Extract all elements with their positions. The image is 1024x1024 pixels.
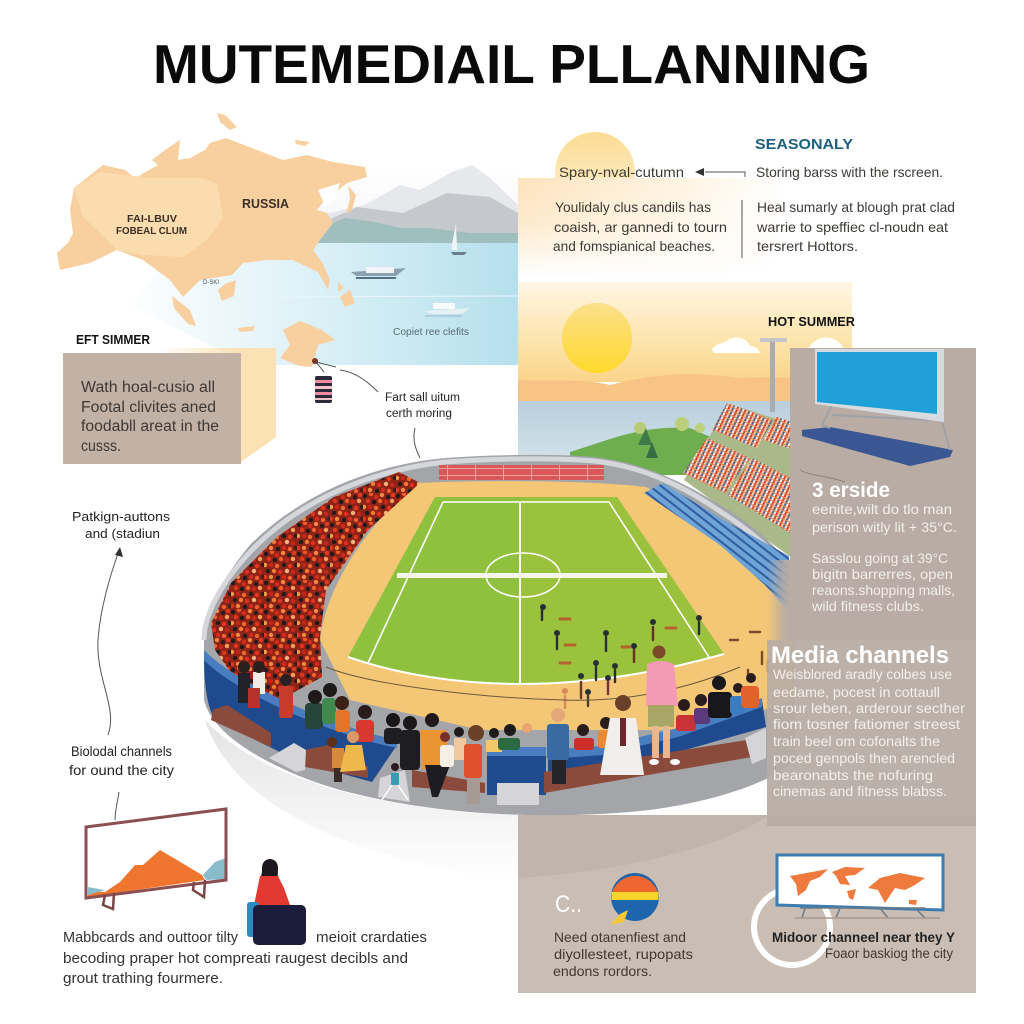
stadium outer rim xyxy=(204,455,795,815)
text block: beige box: Wath hoal-cusio all xyxy=(81,379,215,396)
text block: midoor channel: Midoor channeel near they Y xyxy=(772,930,955,945)
panel: left beige text box with peach backing xyxy=(63,348,276,464)
map labels: FAI-LBUV xyxy=(127,214,177,225)
callout: patkign-auttons xyxy=(72,509,171,541)
arrowheads xyxy=(115,168,704,557)
text block: 3 erside: reaons.shopping malls, xyxy=(812,582,955,598)
map labels: FOBEAL CLUM xyxy=(116,226,187,237)
text block: 3 erside: perison witly lit + 35°C. xyxy=(812,519,957,535)
text block: 3 erside xyxy=(811,479,957,614)
text block: seasonal right: tersrert Hottors. xyxy=(757,238,858,254)
text block: 3 erside: wild fitness clubs. xyxy=(811,598,924,614)
infographic stands behind stadium xyxy=(683,403,795,560)
text block: seasonal left: Youlidaly clus candils has xyxy=(555,199,711,215)
text block: seasonal right: Heal sumarly at blough prat clad xyxy=(757,199,955,215)
callout: biolodal channels: for ound the city xyxy=(69,763,174,778)
icon: orange flag circle xyxy=(610,873,659,925)
panel: media channels grey panel xyxy=(767,560,976,826)
text block: bottom left: meioit crardaties xyxy=(316,930,427,946)
text block: beige box: cusss. xyxy=(81,438,121,455)
map: Russia and surrounding land xyxy=(57,113,367,367)
panel: hot summer scene xyxy=(518,282,852,475)
icon: clouds and lamp post xyxy=(712,337,844,412)
heading: eft summer: EFT SIMMER xyxy=(76,333,150,347)
concrete steps xyxy=(269,728,766,805)
map labels: D-SKI xyxy=(203,280,219,286)
text block: media channels: train beel om cofonalts the xyxy=(773,733,940,749)
text block: media channels: fiom tosner fatiomer streest xyxy=(773,716,960,732)
red seats xyxy=(439,465,604,480)
callout: patkign-auttons: Patkign-auttons xyxy=(72,509,171,524)
text block: media channels: eedame, pocest in cottaull xyxy=(773,684,940,700)
title: MUTEMEDIAIL PLLANNING xyxy=(153,33,870,95)
icons: boats on the sea xyxy=(351,224,470,316)
text block: seasonal right: Storing barss with the rscreen. xyxy=(756,164,943,180)
icon: person with suitcase xyxy=(247,859,306,945)
text block: bottom left xyxy=(63,930,427,987)
text block: midoor channel: Foaor baskiog the city xyxy=(825,946,953,961)
icon: blue billboard on platform xyxy=(802,349,953,466)
map labels: Copiet ree clefits xyxy=(393,326,469,338)
panel: right hot summer grey panel xyxy=(790,348,976,640)
man in pink shirt xyxy=(646,646,680,765)
callout: biolodal channels xyxy=(69,744,174,778)
text block: midoor channel xyxy=(772,930,955,961)
text block: beige box xyxy=(81,379,219,455)
blue seats xyxy=(644,483,789,612)
text block: media channels: Media channels xyxy=(771,642,949,669)
text block: media channels: srour leben, arderour secther xyxy=(773,700,965,716)
text block: media channels: cinemas and fitness blabss. xyxy=(773,783,947,799)
stadium illustration xyxy=(204,455,795,815)
map labels: RUSSIA xyxy=(242,196,290,211)
left crowd xyxy=(211,472,420,700)
text block: seasonal right xyxy=(756,164,955,254)
text block: bottom centre: endons rordors. xyxy=(553,963,652,979)
stadium shadow xyxy=(205,720,518,880)
callout: patkign-auttons: and (stadiun xyxy=(85,526,160,541)
text block: bottom centre: Need otanenfiest and xyxy=(554,929,686,945)
football pitch xyxy=(348,497,724,684)
text block: seasonal left xyxy=(553,164,727,254)
text block: media channels: bearonabts the nofuring xyxy=(773,767,933,783)
text block: bottom centre xyxy=(553,929,693,979)
text block: beige box: foodabll areat in the xyxy=(81,418,219,435)
icon: left billboard with mountain chart xyxy=(86,809,226,909)
icon: outdoor screen with world map xyxy=(754,855,943,965)
callout: fart sall: certh moring xyxy=(386,408,452,420)
text block: media channels: Weisblored aradly colbes use xyxy=(773,666,952,682)
spectators xyxy=(238,661,759,804)
text block: 3 erside: Sasslou going at 39°C xyxy=(812,550,948,566)
background panel: sea and mountains xyxy=(120,165,518,365)
panel: seasonal warm band xyxy=(518,132,756,269)
text block: seasonal right: warrie to speffiec cl-noudn eat xyxy=(756,219,948,235)
text block: 3 erside: 3 erside xyxy=(812,479,890,502)
map labels xyxy=(116,196,469,338)
callout: biolodal channels: Biolodal channels xyxy=(71,744,172,759)
text block: beige box: Footal clivites aned xyxy=(81,399,216,416)
text block: seasonal left: coaish, ar gannedi to tourn xyxy=(554,219,727,235)
panel: bottom media channels background xyxy=(518,815,976,993)
heading: seasonaly: SEASONALY xyxy=(755,136,853,153)
text block: bottom centre: diyollesteet, rupopats xyxy=(554,946,693,962)
callout: fart sall xyxy=(385,392,460,420)
spectator wall left and centre xyxy=(204,652,397,782)
text block: seasonal left: and fomspianical beaches. xyxy=(553,238,715,254)
text block: bottom left: grout trathing fourmere. xyxy=(63,971,223,987)
players on pitch xyxy=(541,605,768,708)
text block: media channels xyxy=(771,642,965,799)
icon: striped bag with line xyxy=(312,358,336,403)
sand track xyxy=(320,481,795,730)
connector lines and arrows xyxy=(98,172,845,820)
text block: seasonal left: Spary-nval-cutumn xyxy=(559,164,684,180)
text block: 3 erside: eenite,wilt do tlo man xyxy=(812,501,952,517)
text block: bottom left: becoding praper hot compreati raugest decibls and xyxy=(63,951,408,967)
text block: 3 erside: bigitn barrerres, open xyxy=(812,566,953,582)
label: C...: C.. xyxy=(555,891,582,918)
text block: media channels: poced genpols then arencled xyxy=(773,750,955,766)
heading: hot summer: HOT SUMMER xyxy=(768,315,855,329)
benches xyxy=(211,705,752,793)
text block: bottom left: Mabbcards and outtoor tilty xyxy=(63,930,239,946)
track line xyxy=(326,667,740,700)
callout: fart sall: Fart sall uitum xyxy=(385,392,460,404)
